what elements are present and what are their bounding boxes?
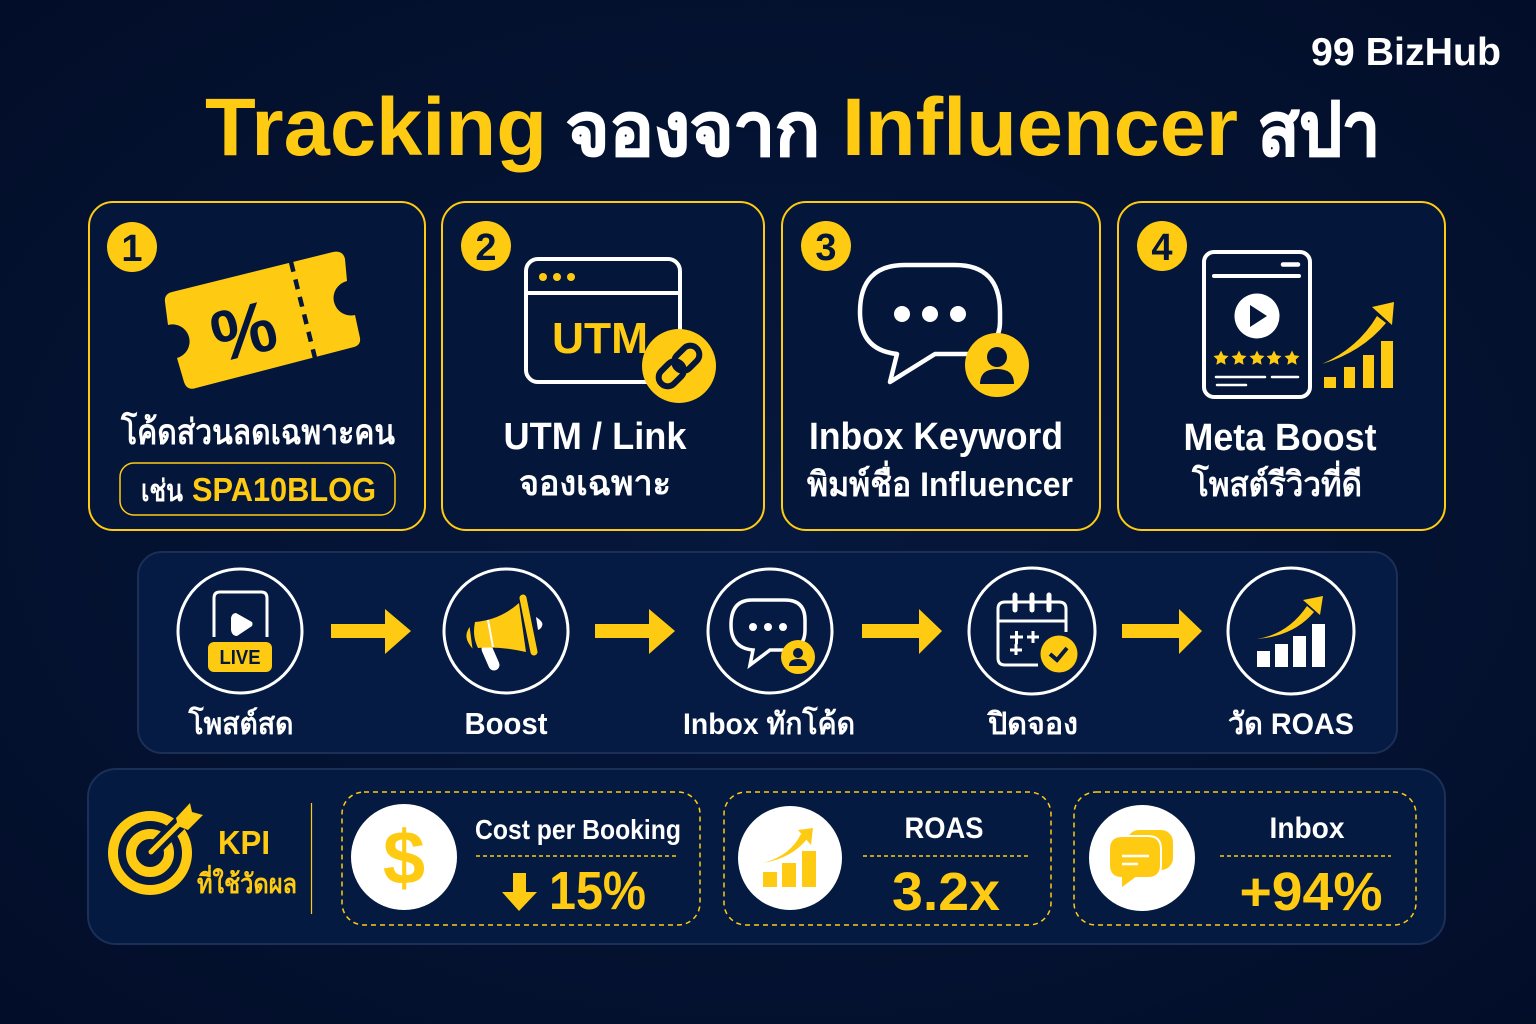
divider: [310, 803, 312, 914]
icon: browser with link: [526, 259, 716, 403]
icon: target: [113, 803, 203, 890]
panel: KPI: [88, 769, 1445, 944]
badge 1: 1: [121, 228, 143, 270]
title: Tracking: [205, 82, 547, 173]
step: measure ROAS: [1228, 568, 1354, 741]
badge 2: 2: [475, 227, 497, 269]
arrow: [595, 609, 675, 654]
step: boost: Boost: [464, 706, 548, 741]
KPI card: cost per booking: Cost per Booking: [475, 814, 681, 845]
step: inbox: [683, 569, 855, 741]
step: close booking: [969, 568, 1095, 741]
icon: coupon ticket: %: [203, 285, 285, 378]
panel: step 3 inbox keyword: [782, 202, 1100, 530]
badge 3: [801, 221, 851, 271]
KPI card: cost per booking: [342, 792, 700, 925]
KPI card: inbox: Inbox: [1270, 812, 1345, 845]
panel: step 3 inbox keyword: พิมพ์ชื่อ Influencer: [807, 460, 1073, 504]
example code pill: SPA10BLOG: [192, 471, 376, 508]
label: discount code: โค้ดส่วนลดเฉพาะคน: [120, 411, 395, 452]
step: boost: [444, 569, 568, 741]
title: Influencer: [842, 82, 1238, 173]
step: close booking: ปิดจอง: [986, 708, 1078, 741]
example code pill: เช่น: [141, 475, 183, 508]
KPI card: inbox: +94%: [1240, 862, 1382, 922]
badge 4: [1137, 221, 1187, 271]
label: UTM: UTM / Link: [504, 416, 687, 458]
step: live post: LIVE: [220, 647, 260, 669]
brand: 99 BizHub: [1311, 31, 1501, 74]
step: inbox: Inbox ทักโค้ด: [683, 705, 855, 741]
KPI card: ROAS: 3.2x: [892, 862, 1000, 922]
title: สปา: [1258, 88, 1380, 171]
badge 1: [107, 222, 157, 272]
KPI heading: [197, 824, 297, 899]
panel: step 4 meta boost: โพสต์รีวิวที่ดี: [1191, 460, 1362, 504]
badge 3: 3: [815, 227, 837, 269]
panel: step 1 discount code: [89, 202, 425, 530]
arrow: [1122, 609, 1202, 654]
example code pill: [120, 463, 395, 515]
label: meta boost: Meta Boost: [1184, 417, 1377, 459]
panel: funnel flow: [138, 552, 1397, 753]
panel: step 2 UTM link: [442, 202, 764, 530]
icon: chat with user: [860, 265, 1029, 397]
KPI heading: ที่ใช้วัดผล: [197, 864, 297, 899]
step: live post: โพสต์สด: [188, 705, 294, 741]
KPI card: ROAS: [724, 792, 1051, 925]
KPI card: cost per booking: $: [383, 816, 425, 901]
step: measure ROAS: วัด ROAS: [1228, 708, 1354, 741]
label: inbox keyword: Inbox Keyword: [809, 416, 1063, 458]
icon: browser with link: UTM: [552, 314, 648, 363]
KPI heading: KPI: [218, 824, 270, 861]
badge 2: [461, 221, 511, 271]
KPI card: cost per booking: 15%: [549, 861, 646, 921]
icon: phone review with growth chart: [1204, 252, 1394, 397]
panel: step 4 meta boost: [1118, 202, 1445, 530]
KPI card: inbox: [1074, 792, 1416, 925]
icon: coupon ticket: [165, 252, 360, 389]
title: [205, 82, 1380, 173]
KPI card: ROAS: ROAS: [904, 812, 984, 845]
badge 4: 4: [1151, 227, 1173, 269]
title: จองจาก: [566, 88, 820, 171]
arrow: [862, 609, 942, 654]
arrow: [331, 609, 411, 654]
step: live post: [178, 569, 302, 741]
panel: step 2 UTM link: จองเฉพาะ: [519, 464, 671, 503]
